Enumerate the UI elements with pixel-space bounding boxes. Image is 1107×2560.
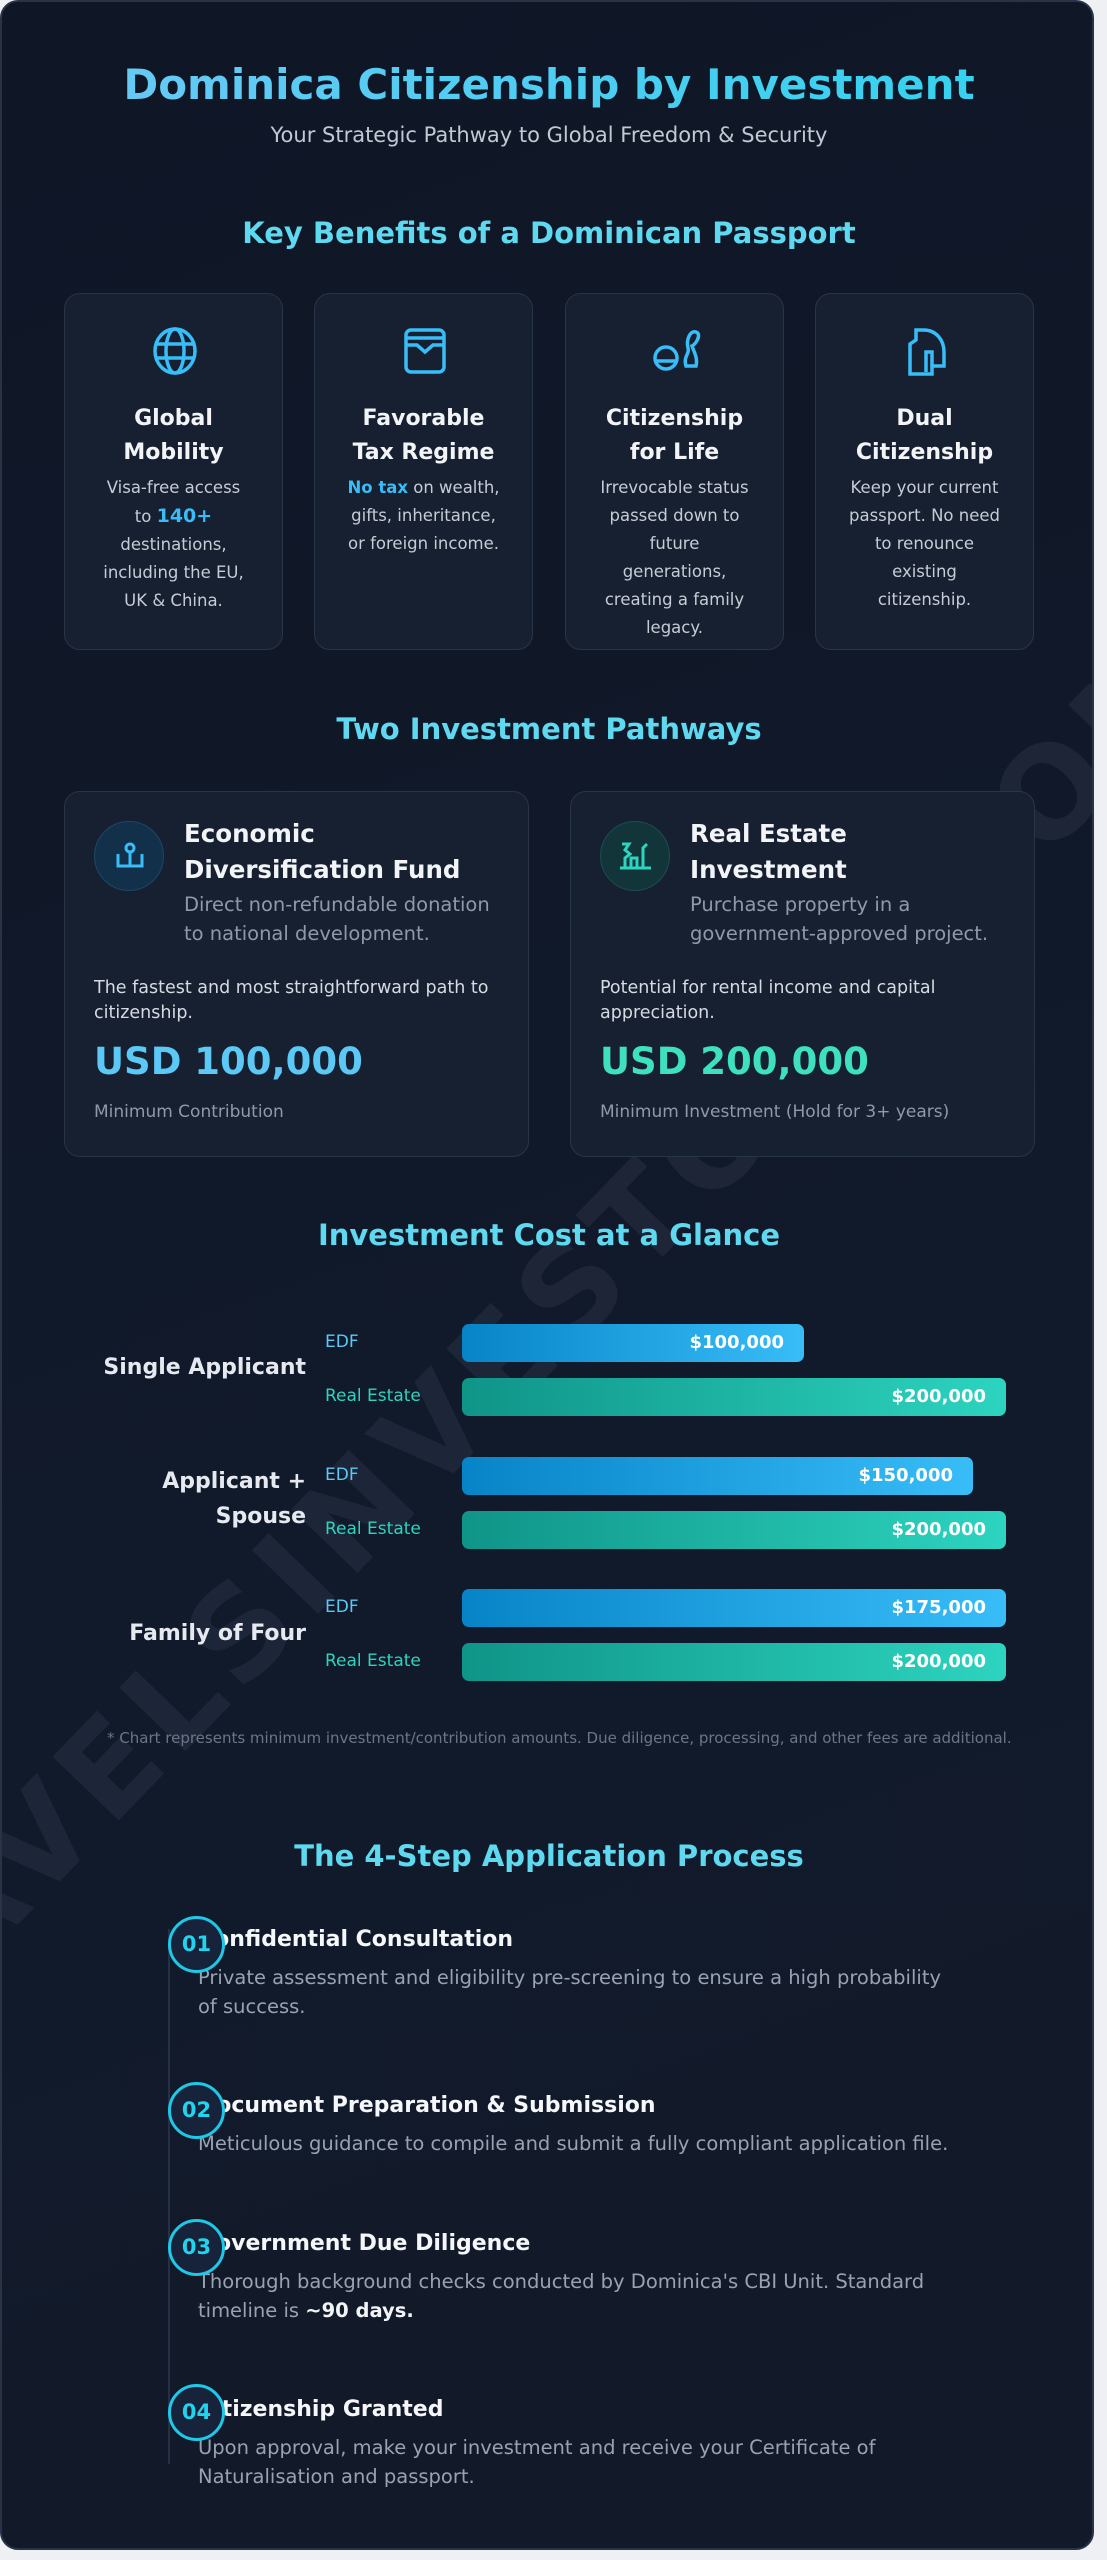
- main panel: 03: [182, 2235, 211, 2259]
- bar chart: $100,000: [689, 1332, 784, 1353]
- main panel: Thorough background checks conducted by Dominica's CBI Unit. Standard timeline is ~90 days.: [198, 2270, 924, 2322]
- group: applicant + spouse: [162, 1469, 306, 1529]
- heading: process: The 4-Step Application Process: [294, 1839, 804, 1873]
- step 4: [168, 2384, 876, 2488]
- card: global mobility: [64, 293, 283, 650]
- card: citizenship for life: Irrevocable status passed down to future generations, creating a family legacy.: [600, 478, 749, 637]
- bar chart: $150,000: [858, 1465, 953, 1486]
- bar chart: Real Estate: [325, 1651, 421, 1671]
- card: dual citizenship: [815, 293, 1034, 650]
- main panel: Confidential Consultation: [198, 1927, 513, 1952]
- card: global mobility: to 140+: [135, 505, 212, 527]
- main panel: Private assessment and eligibility pre-screening to ensure a high probability of success.: [198, 1966, 941, 2018]
- panel: real estate: Minimum Investment (Hold for 3+ years): [600, 1102, 949, 1122]
- panel: real estate: Investment: [690, 855, 847, 884]
- card: global mobility: Global: [134, 406, 213, 431]
- panel: real estate: [570, 791, 1035, 1157]
- card: tax regime: Favorable: [363, 406, 484, 431]
- main panel: 01: [182, 1932, 211, 1956]
- icon: wallet: [404, 328, 446, 374]
- panel: EDF: The fastest and most straightforward path to citizenship.: [94, 978, 488, 1023]
- panel: EDF: Economic: [184, 819, 315, 848]
- panel: real estate: Purchase property in a: [690, 893, 910, 916]
- main panel: Citizenship Granted: [198, 2397, 443, 2422]
- card: global mobility: UK & China.: [124, 591, 223, 610]
- panel: EDF: USD 100,000: [94, 1040, 363, 1083]
- card: dual citizenship: Keep your current passport. No need to renounce existing citizenship.: [849, 478, 1000, 609]
- card: dual citizenship: Dual: [896, 406, 953, 431]
- title: Dominica Citizenship by Investment: [123, 60, 975, 109]
- group: single applicant: Single Applicant: [103, 1355, 306, 1380]
- panel: real estate: Potential for rental income and capital appreciation.: [600, 978, 935, 1023]
- heading: cost: Investment Cost at a Glance: [318, 1218, 780, 1252]
- icon: passports: [908, 328, 946, 376]
- main panel: Document Preparation & Submission: [198, 2093, 656, 2118]
- card: citizenship for life: [565, 293, 784, 650]
- panel: EDF: to national development.: [184, 922, 430, 945]
- heading: key benefits: Key Benefits of a Dominican Passport: [242, 216, 856, 250]
- main panel: Upon approval, make your investment and receive your Certificate of Naturalisation and passport.: [198, 2436, 875, 2488]
- panel: EDF: Direct non-refundable donation: [184, 893, 490, 916]
- card: global mobility: Mobility: [123, 440, 224, 465]
- bar chart: Real Estate: [325, 1386, 421, 1406]
- card: citizenship for life: for Life: [630, 440, 719, 465]
- timeline line: [168, 1929, 170, 2464]
- bar chart: EDF: [325, 1465, 359, 1485]
- card: citizenship for life: Citizenship: [606, 406, 743, 431]
- icon: family: [653, 330, 700, 371]
- bar chart: $200,000: [891, 1519, 986, 1540]
- step 2: [168, 2082, 948, 2155]
- card: dual citizenship: Citizenship: [856, 440, 993, 465]
- panel: real estate: Real Estate: [690, 819, 847, 848]
- bar chart: [103, 1324, 1006, 1681]
- panel: EDF: Diversification Fund: [184, 855, 460, 884]
- main panel: 02: [182, 2098, 211, 2122]
- panel: real estate: USD 200,000: [600, 1040, 869, 1083]
- panel: real estate: government-approved project.: [690, 922, 988, 945]
- subtitle: Your Strategic Pathway to Global Freedom & Security: [270, 123, 827, 147]
- card: tax regime: Tax Regime: [353, 440, 494, 465]
- icon: globe: [153, 327, 197, 375]
- card: tax regime: No tax on wealth, gifts, inheritance, or foreign income.: [347, 478, 500, 553]
- footnote: * Chart represents minimum investment/contribution amounts. Due diligence, processing, and other fees are additional.: [107, 1729, 1012, 1747]
- card: global mobility: Visa-free access: [107, 478, 240, 497]
- bar chart: Real Estate: [325, 1519, 421, 1539]
- bar chart: $200,000: [891, 1386, 986, 1407]
- group: applicant + spouse: Applicant +: [162, 1469, 306, 1494]
- bar chart: $175,000: [891, 1597, 986, 1618]
- step 3: [168, 2219, 924, 2322]
- group: applicant + spouse: Spouse: [216, 1504, 306, 1529]
- icon: buildings: [600, 821, 670, 891]
- heading: pathways: Two Investment Pathways: [336, 712, 762, 746]
- main panel: 04: [182, 2400, 211, 2424]
- bar chart: EDF: [325, 1332, 359, 1352]
- icon: fund: [94, 821, 164, 891]
- main panel: Government Due Diligence: [198, 2231, 530, 2256]
- bar chart: $200,000: [891, 1651, 986, 1672]
- card: global mobility: including the EU,: [103, 563, 244, 582]
- group: family of four: Family of Four: [129, 1621, 306, 1646]
- panel: EDF: [64, 791, 529, 1157]
- main panel: Meticulous guidance to compile and submit a fully compliant application file.: [198, 2132, 948, 2155]
- panel: EDF: Minimum Contribution: [94, 1102, 284, 1122]
- card: global mobility: destinations,: [120, 535, 227, 554]
- card: tax regime: [314, 293, 533, 650]
- bar chart: EDF: [325, 1597, 359, 1617]
- step 1: [168, 1916, 941, 2018]
